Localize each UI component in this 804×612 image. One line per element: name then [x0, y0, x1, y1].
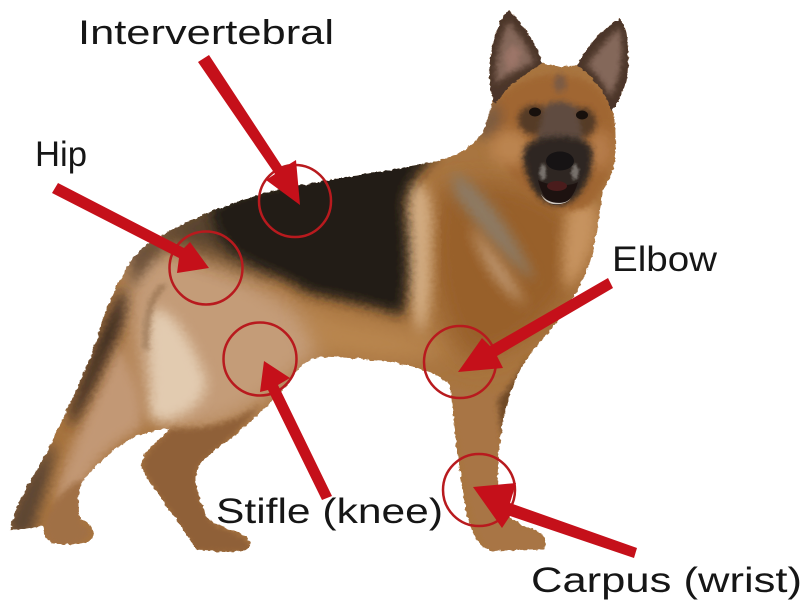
cheeks: [490, 130, 530, 166]
circle: stifle joint: [224, 322, 296, 396]
circle: carpus joint: [443, 454, 515, 526]
label: Carpus (wrist): Carpus (wrist): [531, 561, 802, 600]
pale shoulder stripe: [405, 182, 433, 335]
nose: [546, 152, 574, 170]
left ear: [489, 9, 543, 104]
hindquarter tan: [126, 240, 325, 430]
label: Intervertebral: Intervertebral: [78, 14, 334, 52]
dog body base: [10, 9, 628, 552]
circle: hip joint: [170, 232, 242, 304]
arrow: carpus: [473, 483, 637, 558]
forehead mark: [554, 74, 566, 92]
crease behind thigh: [146, 285, 165, 350]
circle: elbow joint: [424, 326, 496, 398]
tail dark edge: [70, 285, 126, 430]
left eye: [529, 108, 541, 116]
mouth: [538, 180, 578, 205]
arrow: elbow: [458, 278, 613, 372]
chin: [541, 194, 571, 204]
muzzle: [535, 102, 584, 145]
shoulder brown: [432, 182, 590, 360]
far hind leg: [45, 480, 90, 546]
lower front leg: [450, 385, 548, 552]
tail pale fur: [55, 340, 143, 510]
near hind leg: [143, 405, 260, 552]
label: Elbow: Elbow: [612, 240, 718, 279]
circle: intervertebral joint: [259, 165, 331, 237]
right eye: [576, 110, 588, 120]
illustration: German Shepherd dog: [5, 9, 628, 552]
arrow: stifle: [260, 361, 332, 500]
grey neck ruff: [452, 172, 535, 280]
saddle: black back: [211, 150, 440, 316]
pale thigh fur: [148, 309, 206, 421]
saddle fade over hip: [160, 190, 280, 275]
right ear: [577, 18, 628, 112]
label: Hip: Hip: [35, 135, 87, 174]
muzzle grey sides: [540, 164, 546, 180]
eye patches: [518, 105, 550, 135]
arrow: hip: [52, 183, 209, 273]
belly warm fur: [300, 310, 450, 360]
neck shadow left of face: [475, 100, 501, 138]
tongue: [547, 181, 567, 191]
arrow: intervertebral: [198, 55, 300, 205]
tail root: [130, 230, 180, 290]
label: Stifle (knee): Stifle (knee): [216, 492, 443, 531]
head tan: [490, 75, 614, 211]
right ruff: [562, 200, 597, 290]
